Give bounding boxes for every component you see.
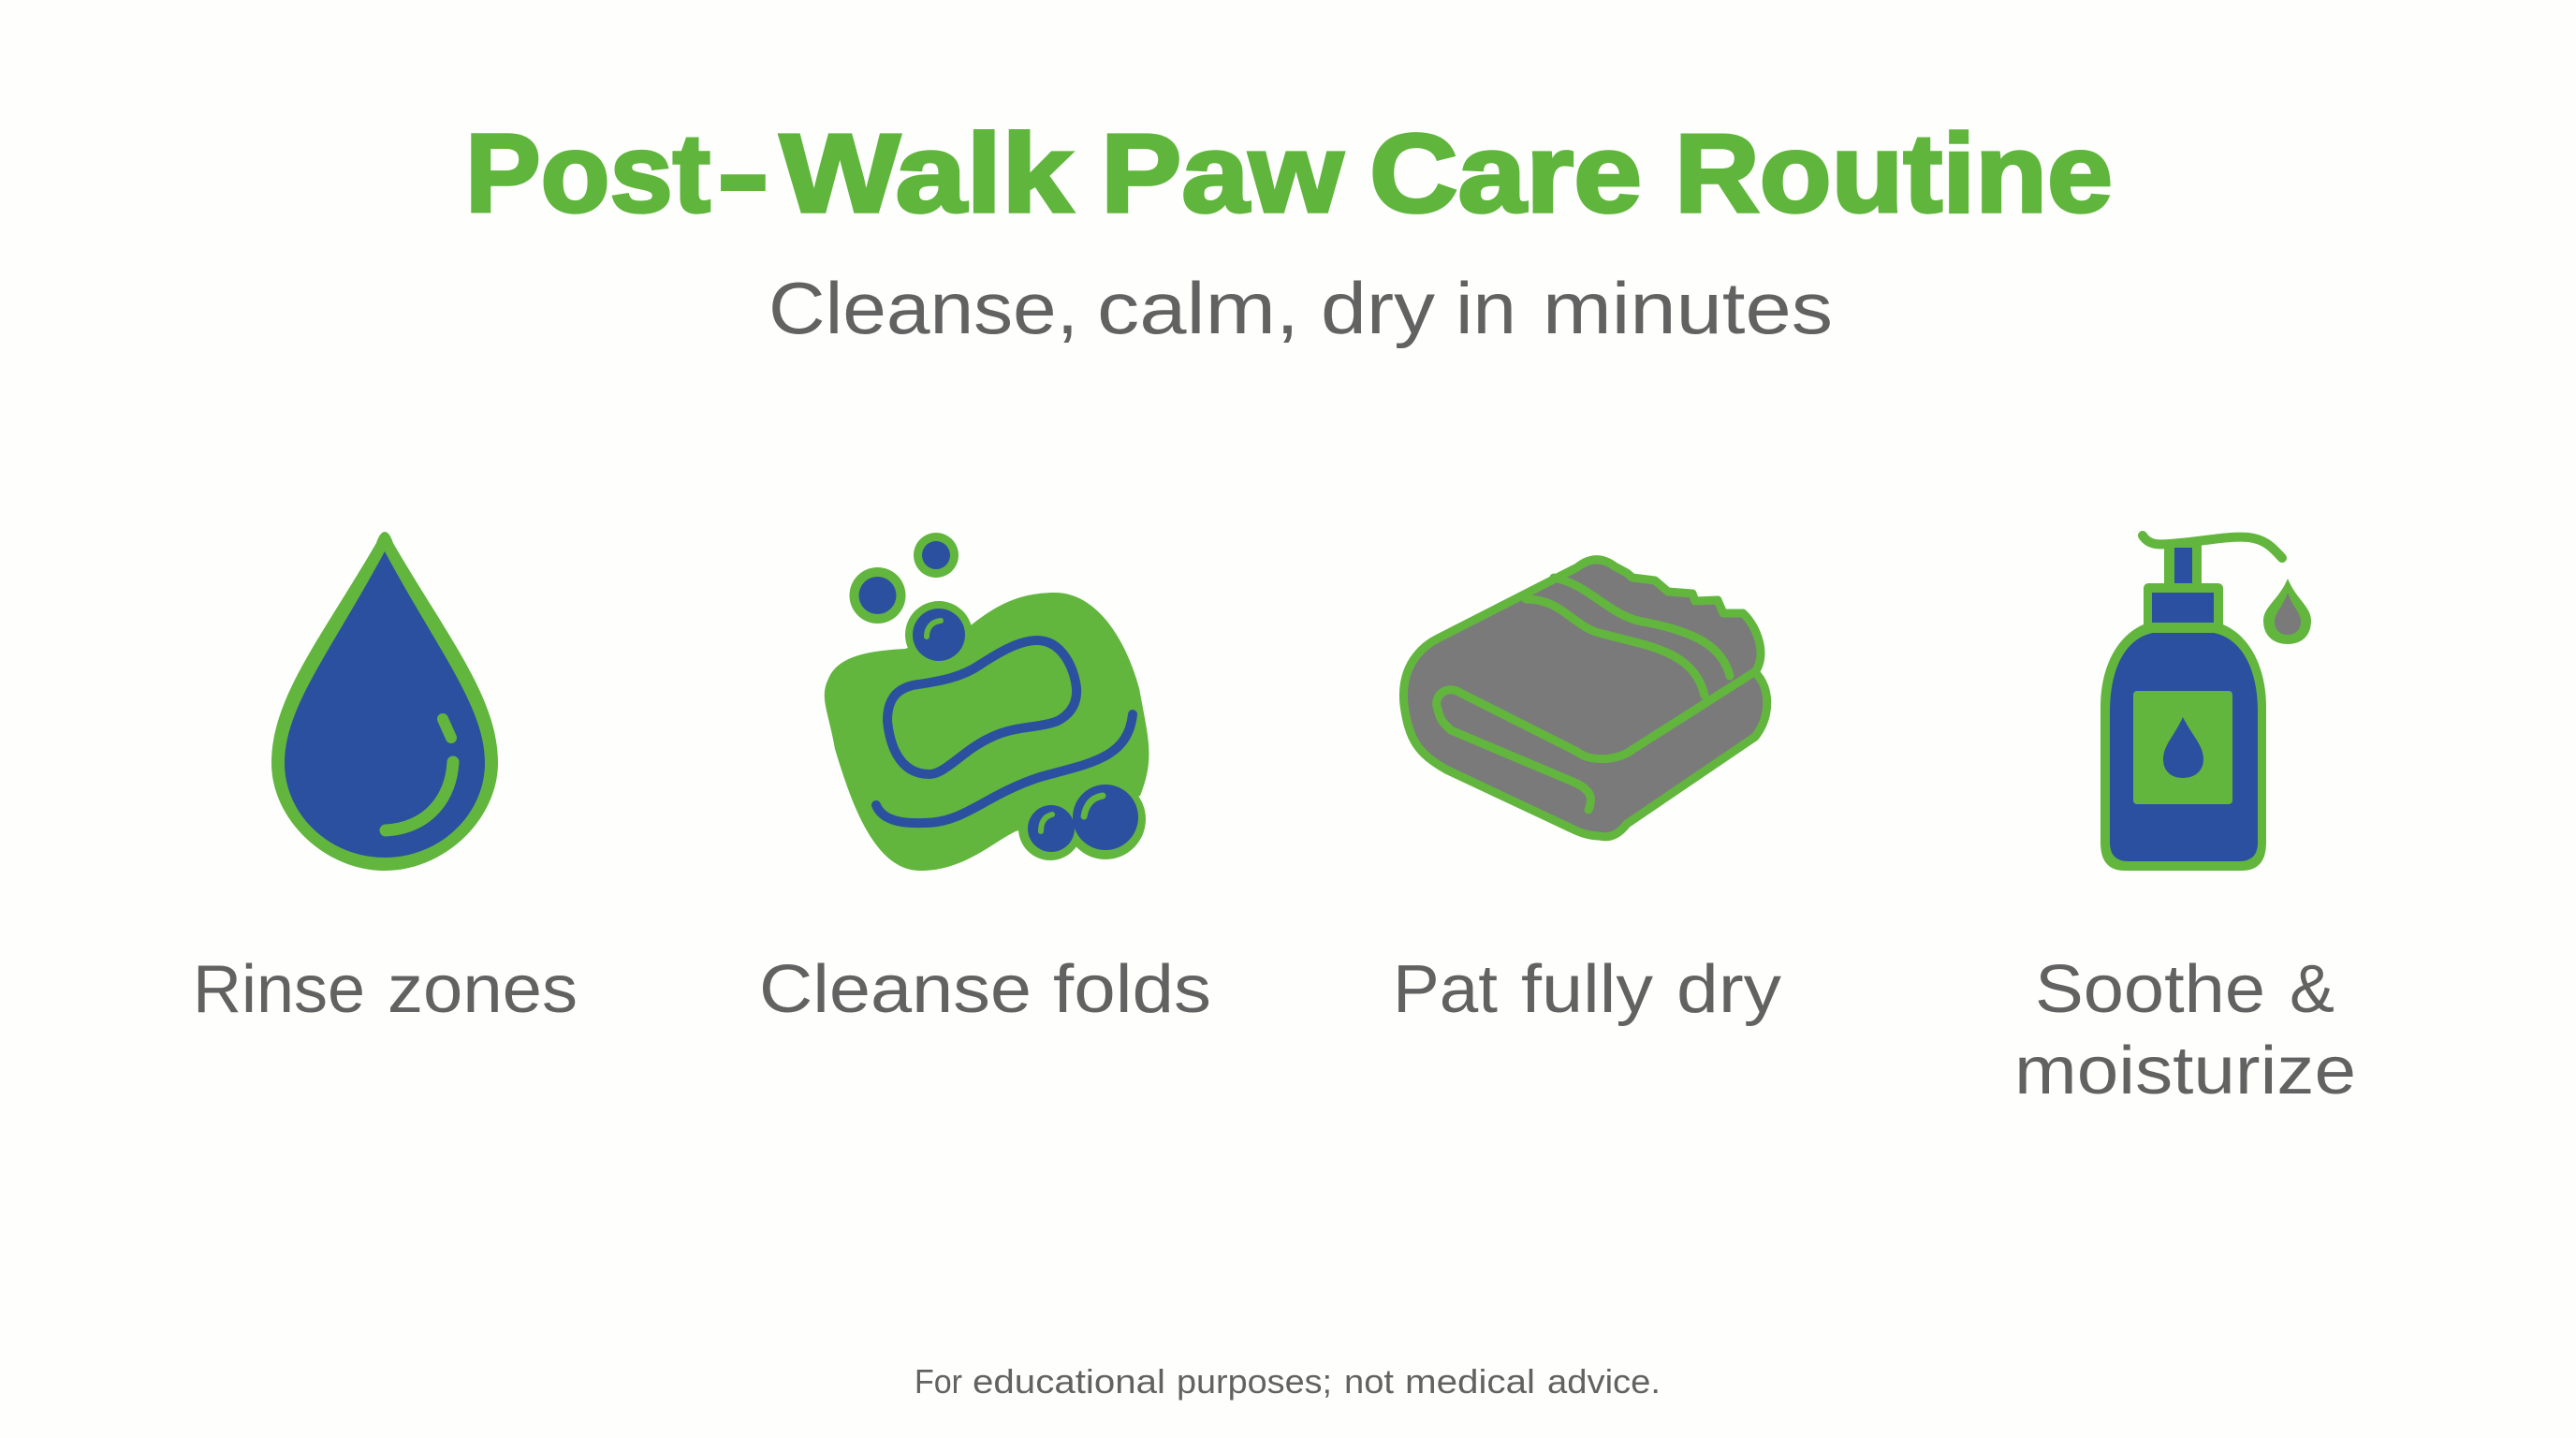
- icon: water drop: [271, 532, 498, 871]
- subtitle: calm,: [1097, 267, 1299, 349]
- label: pat fully dry: Pat: [1393, 952, 1498, 1027]
- label: cleanse folds: Cleanse: [759, 952, 1032, 1027]
- label: cleanse folds: folds: [1053, 952, 1211, 1027]
- footer disclaimer: advice.: [1547, 1362, 1661, 1401]
- label: pat fully dry: fully: [1521, 952, 1653, 1027]
- title: [465, 111, 2113, 236]
- title: -: [717, 111, 769, 236]
- icon: soap bar with bubbles: [825, 533, 1149, 871]
- label: soothe and moisturize: Soothe: [2035, 952, 2265, 1027]
- title: Post: [465, 111, 710, 236]
- title: Walk: [780, 111, 1074, 236]
- title: Care: [1369, 111, 1642, 236]
- footer disclaimer: For: [915, 1362, 962, 1401]
- label: soothe and moisturize: &: [2290, 952, 2334, 1027]
- footer disclaimer: medical: [1405, 1362, 1535, 1401]
- label: pat fully dry: dry: [1676, 952, 1781, 1027]
- icon: folded towel: [1403, 560, 1767, 837]
- label: rinse zones: [193, 952, 578, 1027]
- label: rinse zones: Rinse: [193, 952, 365, 1027]
- title: Routine: [1675, 111, 2113, 236]
- label: pat fully dry: [1393, 952, 1781, 1027]
- label: soothe and moisturize: [2014, 952, 2356, 1108]
- label: soothe and moisturize: moisturize: [2014, 1034, 2356, 1108]
- footer disclaimer: [915, 1362, 1661, 1401]
- label: cleanse folds: [759, 952, 1211, 1027]
- subtitle: minutes: [1543, 267, 1833, 349]
- footer disclaimer: not: [1344, 1362, 1394, 1401]
- icon: pump bottle: [2100, 536, 2311, 871]
- subtitle: in: [1456, 267, 1516, 349]
- title: Paw: [1101, 111, 1343, 236]
- subtitle: dry: [1321, 267, 1435, 349]
- label: rinse zones: zones: [388, 952, 578, 1027]
- subtitle: Cleanse,: [768, 267, 1078, 349]
- footer disclaimer: purposes;: [1177, 1362, 1332, 1401]
- subtitle: [768, 267, 1833, 349]
- footer disclaimer: educational: [973, 1362, 1165, 1401]
